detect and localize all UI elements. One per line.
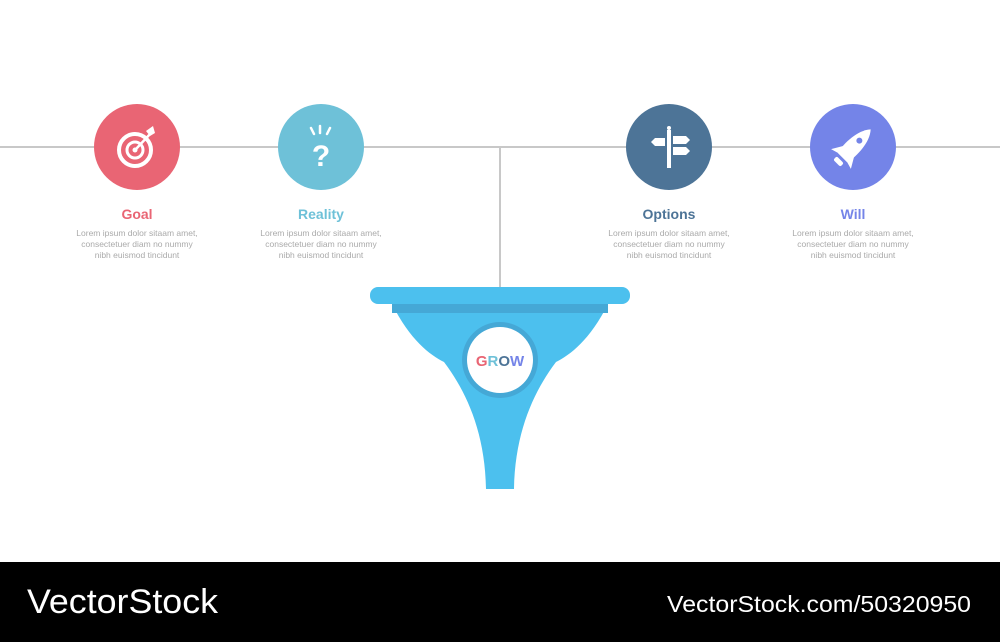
step: Goal: [76, 104, 198, 260]
footer bar: [0, 562, 1000, 642]
footer bar: VectorStock: [27, 583, 219, 621]
step: Reality: consectetuer diam no nummy: [265, 239, 377, 249]
step: Will: nibh euismod tincidunt: [811, 250, 896, 260]
icon: target: [94, 104, 180, 190]
step: Will: Lorem ipsum dolor sitaam amet,: [792, 228, 914, 238]
step: Goal: nibh euismod tincidunt: [95, 250, 180, 260]
icon: rocket: [810, 104, 896, 190]
step: Reality: nibh euismod tincidunt: [279, 250, 364, 260]
icon: question: ?: [312, 140, 330, 173]
step: Options: Lorem ipsum dolor sitaam amet,: [608, 228, 730, 238]
step: Will: consectetuer diam no nummy: [797, 239, 909, 249]
step: Options: Options: [643, 206, 696, 222]
funnel: [370, 287, 630, 489]
step: Options: nibh euismod tincidunt: [627, 250, 712, 260]
GROW badge: [462, 322, 538, 398]
step: Will: [792, 104, 914, 260]
step: Goal: Lorem ipsum dolor sitaam amet,: [76, 228, 198, 238]
step: Goal: consectetuer diam no nummy: [81, 239, 193, 249]
step: Reality: Reality: [298, 206, 344, 222]
step: Reality: Lorem ipsum dolor sitaam amet,: [260, 228, 382, 238]
icon: signpost: [626, 104, 712, 190]
step: Reality: [260, 104, 382, 260]
step: Options: [608, 104, 730, 260]
GROW badge: GROW: [476, 353, 525, 370]
step: Will: Will: [841, 206, 865, 222]
step: Goal: Goal: [121, 206, 153, 222]
footer bar: VectorStock.com/50320950: [667, 591, 971, 617]
step: Options: consectetuer diam no nummy: [613, 239, 725, 249]
icon: question: [278, 104, 364, 190]
